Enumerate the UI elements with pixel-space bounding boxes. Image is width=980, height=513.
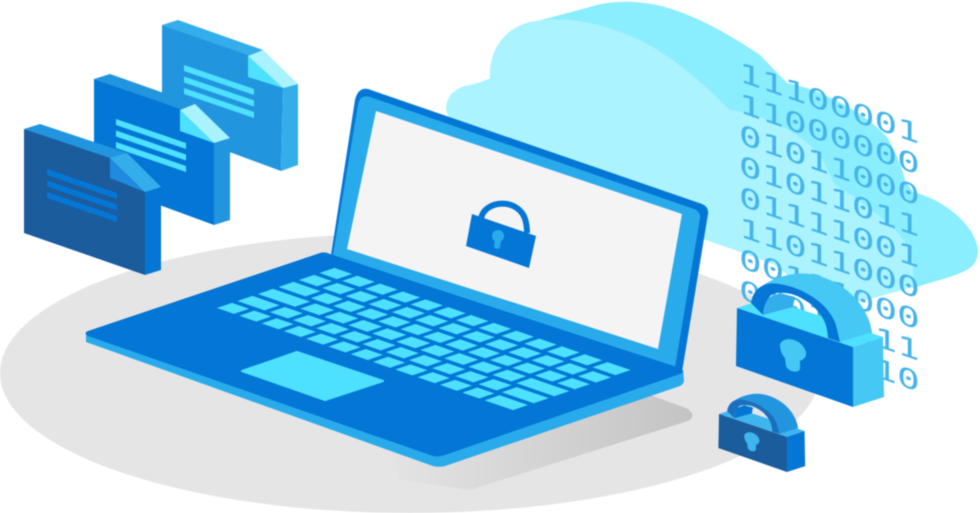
laptop base top bbox=[86, 252, 683, 456]
laptop bbox=[86, 89, 708, 467]
binary digits: 00111000 bbox=[739, 242, 920, 337]
binary digits: 11011000 bbox=[739, 211, 920, 306]
binary digits: 01011011 bbox=[739, 273, 920, 368]
cloud bbox=[446, 2, 978, 310]
keyboard bbox=[217, 268, 632, 410]
document front bbox=[24, 124, 161, 275]
binary digits: 01011011 bbox=[739, 149, 920, 244]
binary digits: 01011000 bbox=[739, 118, 920, 213]
trackpad bbox=[242, 352, 383, 400]
binary digits: 01111001 bbox=[739, 180, 920, 275]
document back bbox=[162, 20, 298, 171]
laptop screen bbox=[331, 89, 708, 372]
cloud front layer bbox=[446, 19, 913, 310]
small padlock bbox=[718, 394, 805, 472]
binary digits bbox=[739, 56, 920, 399]
cloud back layer bbox=[470, 2, 978, 288]
large padlock bbox=[736, 273, 884, 407]
document middle bbox=[94, 74, 230, 225]
binary digits: 11011010 bbox=[739, 304, 920, 399]
screen lock icon bbox=[466, 204, 536, 268]
small keyhole bbox=[744, 432, 760, 451]
gray floor ellipse bbox=[0, 233, 820, 513]
binary digits: 11100001 bbox=[739, 56, 920, 151]
keyhole bbox=[780, 339, 806, 372]
laptop shadow bbox=[380, 395, 693, 490]
binary digits: 11000000 bbox=[739, 87, 920, 182]
laptop base side bbox=[86, 333, 684, 467]
